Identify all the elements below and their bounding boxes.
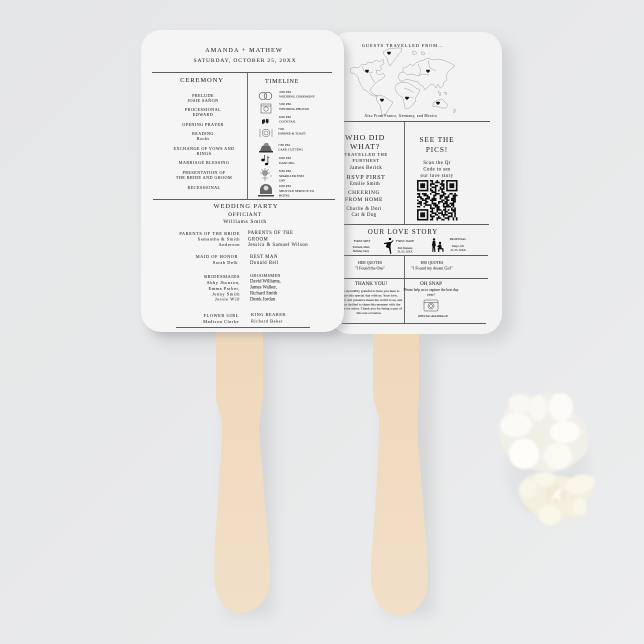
- icon: dancer silhouette: [384, 238, 394, 254]
- panel: ceremony: THE BRIDE AND GROOM: [176, 175, 232, 180]
- thank you note: THANK YOU!: [355, 281, 387, 287]
- panel: wedding party: OFFICIANT: [228, 212, 262, 218]
- panel: wedding party: Williams Smith: [223, 219, 267, 225]
- thank you note: we are thrilled to share this moment with the: [338, 302, 401, 306]
- panel: who did what: Charlie & Dori: [346, 207, 382, 212]
- panel: see the pics: Scan the Qr: [423, 161, 451, 166]
- timeline entries: WEDDING PHOTOS: [279, 107, 309, 111]
- panel: who did what: WHAT?: [350, 142, 380, 151]
- groom side names: PARENTS OF THE: [248, 231, 293, 236]
- panel: wedding party: [176, 203, 310, 328]
- panel: front of fan: [141, 30, 344, 332]
- world map with heart markers: [350, 48, 456, 115]
- thank you note: people we adore. Thank you for being a part of: [336, 306, 403, 310]
- groom side names: Jessica & Samuel Wilson: [248, 243, 308, 248]
- timeline entries: 7:30 PM: [278, 143, 290, 147]
- icon: rings: [259, 92, 272, 100]
- timeline entries: HOTEL: [279, 194, 290, 198]
- timeline entries: SHUTTLE SERVICE TO: [279, 189, 315, 193]
- panel: ceremony: PROCESSIONAL: [185, 107, 221, 112]
- panel: ceremony: PRELUDE: [192, 93, 214, 98]
- icon: sparkler: [260, 168, 272, 181]
- panel: who did what: WHO DID: [345, 133, 385, 142]
- panel: who did what: Cat & Dog: [351, 213, 377, 218]
- panel: who did what: CHEERING: [348, 190, 380, 196]
- dividers: [152, 72, 335, 200]
- panel: ceremony: READING: [192, 131, 214, 136]
- panel: our love story: [353, 229, 466, 254]
- panel: who did what: FROM HOME: [345, 197, 383, 203]
- panel: timeline: TIMELINE: [265, 79, 299, 85]
- bride side names: PARENTS OF THE BRIDE: [179, 231, 240, 236]
- timeline entries: WEDDING CEREMONY: [279, 94, 316, 98]
- panel: wedding party: WEDDING PARTY: [213, 203, 279, 210]
- bride side names: Jenny Smith: [212, 292, 240, 296]
- flower cluster: [499, 393, 597, 525]
- bride side names: MAID OF HONOR: [196, 254, 238, 259]
- timeline entries: COCKTAIL: [279, 120, 296, 124]
- fan shadows: [150, 40, 512, 615]
- timeline entries: 5:00 PM: [279, 102, 291, 106]
- timeline entries: DANCING: [279, 161, 295, 165]
- title: couple names: AMANDA + MATHEW: [205, 47, 283, 54]
- her quotes: "I Found the One": [355, 266, 385, 270]
- groom side names: Derek Jordan: [250, 298, 276, 302]
- bride side names: Jessie Will: [215, 296, 240, 302]
- thank you note: [336, 281, 403, 315]
- his quotes: "I Found my dream Girl": [411, 266, 453, 270]
- icon: cake: [259, 143, 273, 152]
- panel: who did what: [344, 133, 388, 218]
- groom side names: Richard Baker: [251, 318, 283, 324]
- groom side names: David Williams,: [250, 280, 281, 284]
- first met: Birthday Party: [353, 250, 370, 253]
- groom side names: Richard Smith: [250, 292, 278, 296]
- panel: see the pics: our love story: [421, 174, 454, 179]
- thank you note: I am incredibly grateful to have you here to: [339, 289, 400, 293]
- groom side names: GROOM: [248, 238, 268, 242]
- groom side names: KING BEARER: [251, 312, 286, 317]
- groom side names: GROOMSMEN: [250, 273, 281, 278]
- her quotes: [355, 261, 385, 270]
- his quotes: [411, 261, 453, 270]
- timeline entries: 8:00 PM: [279, 156, 291, 160]
- oh snap note: ever!: [427, 293, 435, 297]
- proposal: PROPOSAL: [450, 237, 466, 241]
- bride side names: Sarah Delk: [213, 260, 238, 265]
- panel: ceremony: EDWARD: [193, 112, 213, 117]
- panel: ceremony: RINGS: [197, 151, 212, 156]
- panel: who did what: TRAVELLED THE: [344, 152, 388, 157]
- first met: FIRST MET: [354, 239, 370, 243]
- groom side names: Donald Bell: [250, 261, 279, 266]
- bride side names: Anderson: [219, 242, 240, 247]
- panel: timeline: [258, 79, 316, 198]
- instagram handle: #INSTAGRAMPAGE: [418, 314, 448, 318]
- oh snap note: [404, 281, 459, 318]
- date: SATURDAY, OCTOBER 25, 20XX: [194, 58, 296, 64]
- icon: plate: [260, 129, 272, 137]
- panel: ceremony: [173, 77, 235, 190]
- bride side names: Abby Jhonson,: [206, 280, 240, 286]
- proposal: Tokyo, UK: [452, 245, 464, 248]
- timeline entries: OFF: [279, 178, 285, 182]
- timeline entries: SPARKLER END: [279, 174, 304, 178]
- his quotes: HIS QUOTES: [421, 261, 443, 265]
- flower shadow: [506, 418, 590, 518]
- proposal: [450, 237, 466, 252]
- front fan shadow: [147, 36, 349, 336]
- timeline entries: 9:00 PM: [279, 184, 291, 188]
- icon: shuttle bus: [258, 184, 274, 196]
- first date: FIRST DATE: [396, 239, 414, 243]
- proposal: 25, 05, 20XX: [450, 249, 466, 252]
- heading: guests travelled: GUESTS TRAVELLED FROM...: [362, 43, 444, 48]
- panel: who did what: FURTHEST: [352, 158, 380, 163]
- map caption: Also From France, Germany, and Mexico: [365, 114, 437, 119]
- panel: ceremony: CEREMONY: [180, 77, 224, 84]
- bride side names: FLOWER GIRL: [204, 313, 239, 318]
- first met: Portland, Main: [353, 246, 370, 249]
- timeline entries: CAKE CUTTING: [278, 148, 304, 152]
- QR code: [417, 180, 458, 220]
- bride side names: Emma Parker,: [208, 286, 240, 292]
- back fan handle: [371, 325, 428, 615]
- timeline entries: 8:30 PM: [279, 169, 291, 173]
- bride side names: BRIDESMAIDS: [204, 274, 240, 279]
- panel: ceremony: PRESENTATION OF: [182, 170, 226, 175]
- bride side names: Madison Clarke: [203, 319, 239, 324]
- panel: see the pics: Code to see: [423, 168, 451, 172]
- panel: see the pics: PICS!: [426, 146, 448, 154]
- timeline entries: 4:00 PM: [279, 90, 291, 94]
- icon: cocktail glasses: [262, 119, 268, 124]
- icon: proposal silhouette: [432, 238, 444, 252]
- timeline entries: [278, 90, 316, 198]
- first date: [396, 239, 414, 254]
- panel: see the pics: SEE THE: [419, 136, 455, 144]
- icon: camera: [261, 104, 271, 113]
- icon: music notes: [261, 155, 270, 165]
- oh snap note: OH SNAP: [420, 281, 442, 287]
- bride side names: Samantha & Smith: [198, 236, 240, 242]
- panel: ceremony: OPENING PRAYER: [182, 122, 224, 127]
- panel: ceremony: MARRIAGE BLESSING: [179, 160, 229, 165]
- panel: who did what: Emilie Smith: [350, 182, 380, 187]
- timeline entries: 7:00: [278, 127, 284, 131]
- her quotes: HER QUOTES: [358, 261, 382, 265]
- panel: our love story: OUR LOVE STORY: [368, 229, 438, 236]
- groom side names: James Walker,: [250, 286, 277, 290]
- oh snap note: Please help us to capture the best day: [404, 288, 459, 292]
- first date: 25, 05, 20XX: [397, 250, 413, 254]
- first date: Pub Shenzen: [398, 247, 413, 250]
- groom side names: BEST MAN: [250, 255, 278, 260]
- panel: who did what: RSVP FIRST: [347, 174, 385, 181]
- timeline entries: 6:00 PM: [279, 115, 291, 119]
- panel: ceremony: RECESSIONAL: [187, 185, 221, 190]
- front fan handle: [214, 325, 270, 613]
- timeline entries: DINNER & TOAST: [278, 132, 307, 136]
- small flower: [518, 471, 597, 525]
- bride side names: [179, 231, 240, 324]
- panel: who did what: James Berick: [350, 165, 382, 171]
- first met: [353, 239, 370, 253]
- large flower: [499, 393, 588, 472]
- panel: ceremony: JOSIE SAÑON: [187, 98, 219, 103]
- thank you note: this one occasion.: [357, 311, 382, 315]
- thank you note: share this special day with us. Your love,: [340, 294, 398, 298]
- thank you note: support and presence mean the world to us, and: [336, 298, 403, 303]
- panel: ceremony: Books: [197, 136, 209, 141]
- panel: see the pics: [417, 136, 458, 220]
- groom side names: [248, 231, 308, 324]
- panel: ceremony: EXCHANGE OF VOWS AND: [173, 146, 235, 151]
- dividers: [342, 121, 490, 324]
- panel: back of fan: [330, 32, 502, 334]
- icon: camera: [424, 300, 438, 311]
